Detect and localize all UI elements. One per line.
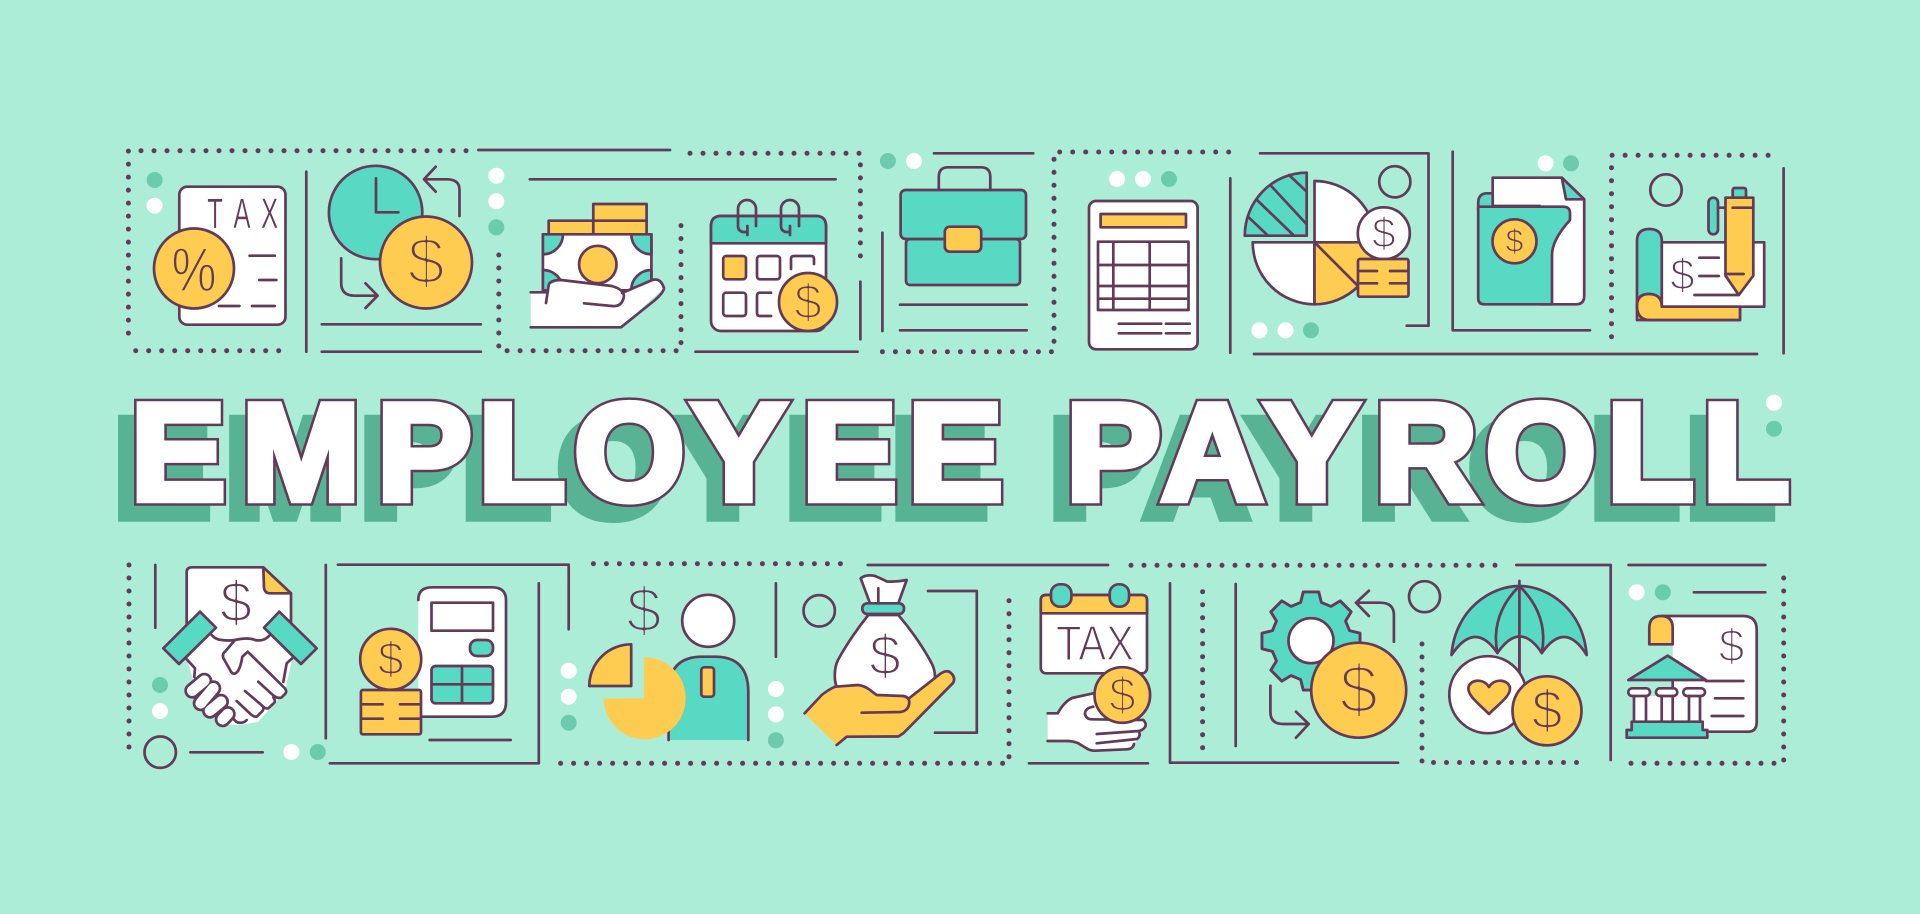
- title: EMPLOYEE PAYROLL: [131, 375, 1789, 529]
- text: dollar: $: [794, 274, 822, 330]
- icon: money bag in hand: [805, 575, 954, 745]
- text: percent sign: %: [172, 236, 216, 305]
- fingers: [192, 681, 228, 719]
- hand clasp lines: [223, 640, 286, 698]
- text: dollar: $: [220, 571, 252, 635]
- accent dots: [147, 153, 1782, 760]
- title shadow: EMPLOYEE PAYROLL: [115, 391, 1773, 545]
- text: dollar: $: [1372, 210, 1396, 258]
- icon: cheque scroll and pen: [1637, 188, 1764, 320]
- icon: handshake over document: [163, 567, 317, 725]
- icon: clock and coin with cycle arrows: [329, 166, 472, 308]
- icon: calendar with coin: [711, 200, 837, 331]
- icon: folder with paper and coin: [1478, 178, 1584, 304]
- title: EMPLOYEE PAYROLL: [131, 375, 1789, 529]
- text: TAX: TAX: [1056, 617, 1134, 671]
- icon: tax calendar and coin in hand: [1041, 584, 1150, 751]
- icon: payroll form with table: [1089, 201, 1198, 349]
- text: dollar: $: [1532, 679, 1562, 741]
- text: dollar: $: [869, 624, 901, 687]
- text: dollar: $: [1670, 251, 1695, 300]
- text: dollar: $: [1719, 620, 1744, 672]
- icon: outline circles: [144, 166, 1682, 768]
- icon: bank building with bill: [1627, 616, 1757, 738]
- icon: cash in hand: [531, 204, 664, 327]
- text: TAX: TAX: [207, 189, 278, 238]
- icon: person with pie chart: [589, 576, 748, 740]
- icon: calculator with coins: [360, 587, 506, 734]
- icon: gear and coin with cycle arrows: [1262, 591, 1406, 738]
- icon: pie chart with coins: [1245, 173, 1410, 304]
- text: dollar: $: [407, 225, 445, 299]
- text: dollar: $: [1506, 223, 1524, 259]
- text: dollar: $: [1109, 669, 1136, 722]
- text: dollar: $: [626, 576, 661, 646]
- icon: briefcase: [901, 167, 1026, 285]
- text: dollar: $: [378, 633, 403, 685]
- icon: tax document with percent coin: [154, 187, 286, 325]
- text: dollar: $: [1340, 651, 1378, 728]
- icon: umbrella over heart and coin: [1449, 581, 1587, 745]
